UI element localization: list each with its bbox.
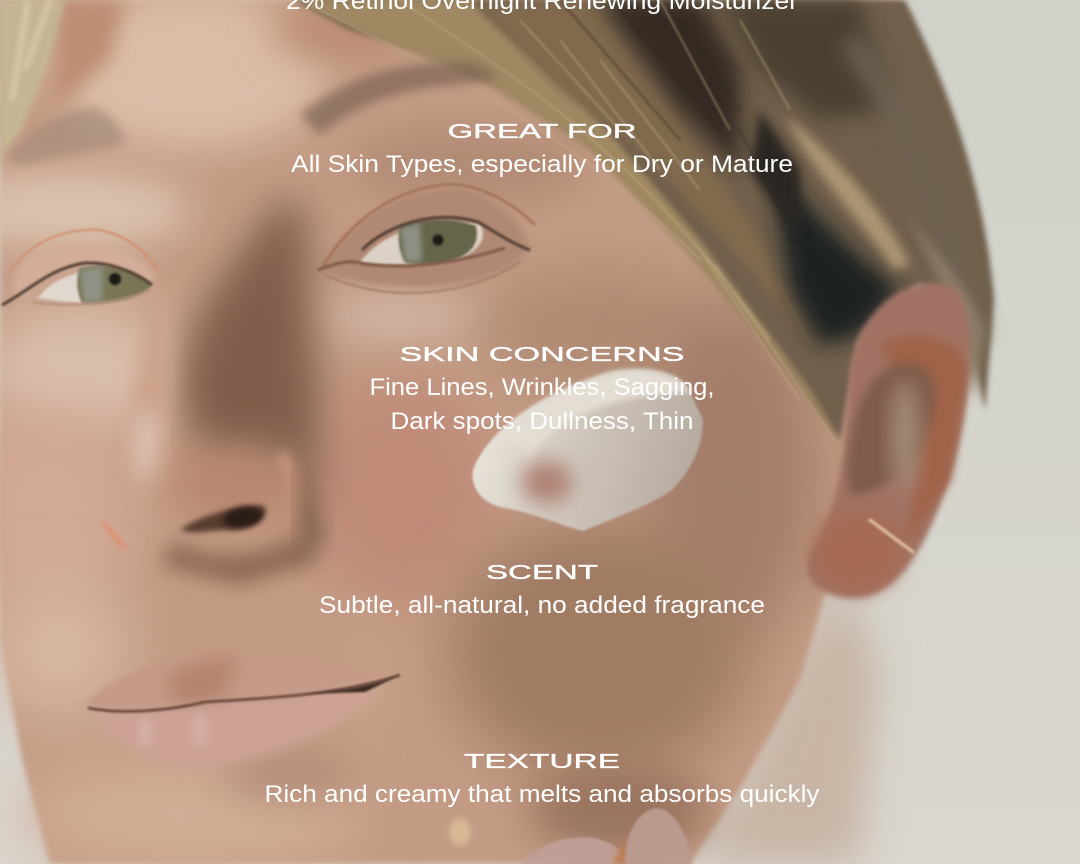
lid line [362, 217, 530, 250]
hair blond streak [785, 115, 910, 270]
nose side light [120, 265, 170, 490]
section: texture [264, 751, 820, 808]
hair main [295, 0, 994, 440]
hair front blond fringe [295, 0, 840, 440]
ear [807, 283, 970, 598]
section: scent [319, 562, 765, 619]
nostril [180, 506, 265, 532]
nose bridge shadow [181, 195, 320, 530]
heading: SCENT [486, 562, 598, 584]
heading: TEXTURE [464, 751, 620, 773]
chin blemish [449, 818, 471, 846]
right cheek [310, 380, 490, 600]
lips [85, 653, 400, 768]
left cheek pale [0, 170, 190, 250]
section: great for [291, 121, 793, 178]
heading: GREAT FOR [448, 121, 636, 143]
description: All Skin Types, especially for Dry or Mature [291, 151, 793, 178]
eye right [318, 184, 535, 293]
description: Subtle, all-natural, no added fragrance [319, 592, 765, 619]
crease [12, 230, 158, 270]
fingers [449, 808, 692, 864]
earring [870, 520, 913, 552]
section: skin concerns [370, 344, 714, 435]
description: Rich and creamy that melts and absorbs quickly [264, 781, 820, 808]
iris [399, 220, 477, 264]
brow bone [350, 125, 590, 205]
iris [77, 266, 152, 303]
cheek-chin highlight [344, 620, 396, 760]
eye left [2, 230, 158, 305]
neck [700, 590, 880, 864]
upper-left pink shadow [50, 0, 125, 115]
forehead light [50, 0, 330, 150]
description line 2: Dark spots, Dullness, Thin [390, 408, 694, 435]
eye white [38, 271, 152, 302]
description: Fine Lines, Wrinkles, Sagging, [370, 374, 714, 401]
eye white [360, 223, 483, 265]
heading: SKIN CONCERNS [400, 344, 684, 366]
nose tip [166, 447, 298, 523]
nose wing mark [100, 518, 130, 552]
hair top left [0, 0, 65, 160]
lashes [2, 263, 152, 305]
eyebrow right [300, 62, 496, 135]
under-eye highlight right [310, 294, 490, 342]
lower-left chin pale [20, 760, 360, 864]
hair strands [310, 0, 835, 440]
eyebrow left [5, 108, 125, 165]
cream swatch [473, 369, 703, 531]
hair dark zones [600, 0, 740, 170]
